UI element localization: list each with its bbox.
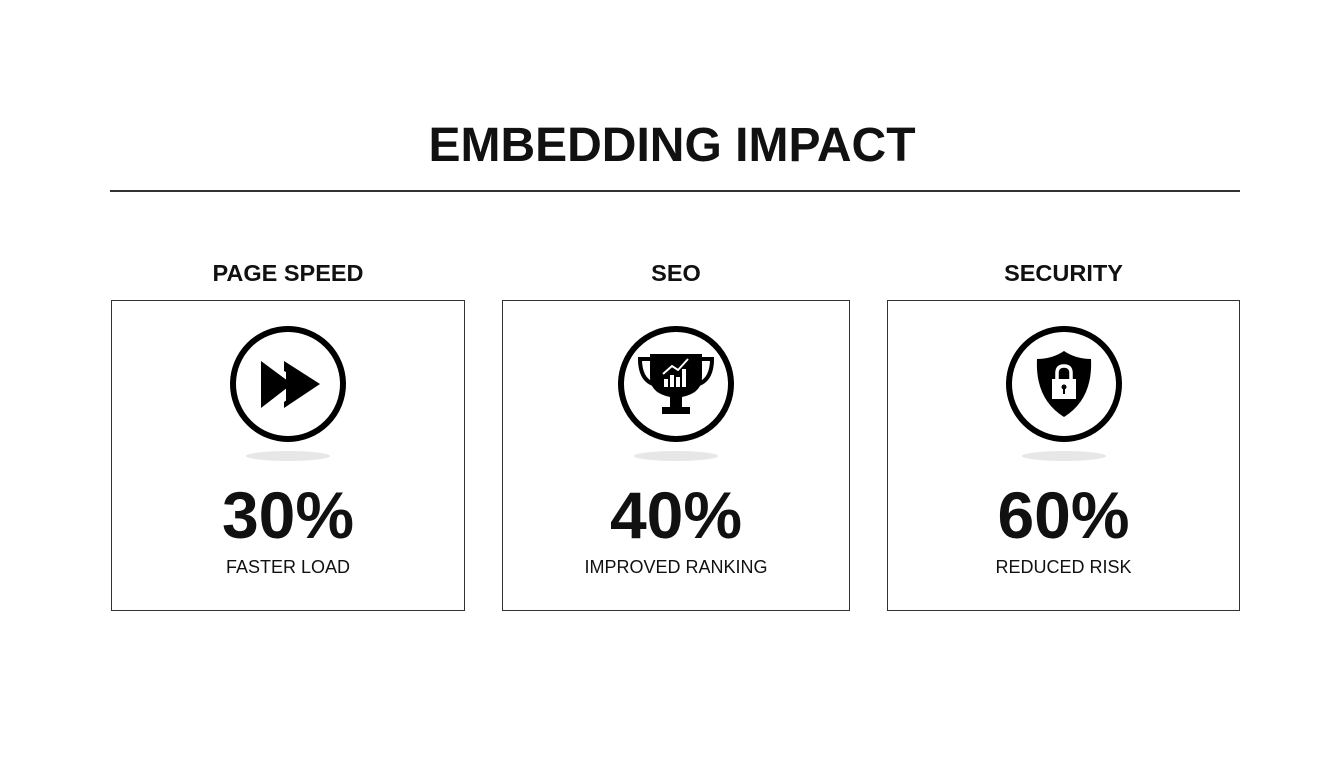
icon: shield lock	[1006, 326, 1122, 461]
panel: page speed	[111, 300, 465, 611]
heading: security: SECURITY	[1004, 260, 1123, 286]
label: REDUCED RISK	[995, 557, 1132, 577]
panel: seo	[502, 300, 850, 611]
icon: fast forward	[230, 326, 346, 461]
label: IMPROVED RANKING	[584, 557, 768, 577]
heading: seo: SEO	[651, 260, 701, 286]
value: 60%	[997, 478, 1130, 552]
value: 30%	[222, 478, 354, 552]
icon: trophy	[618, 326, 734, 461]
value: 40%	[610, 478, 742, 552]
title: EMBEDDING IMPACT	[428, 119, 916, 172]
panel: security	[887, 300, 1240, 611]
heading: page speed: PAGE SPEED	[212, 260, 364, 286]
label: FASTER LOAD	[226, 557, 350, 577]
